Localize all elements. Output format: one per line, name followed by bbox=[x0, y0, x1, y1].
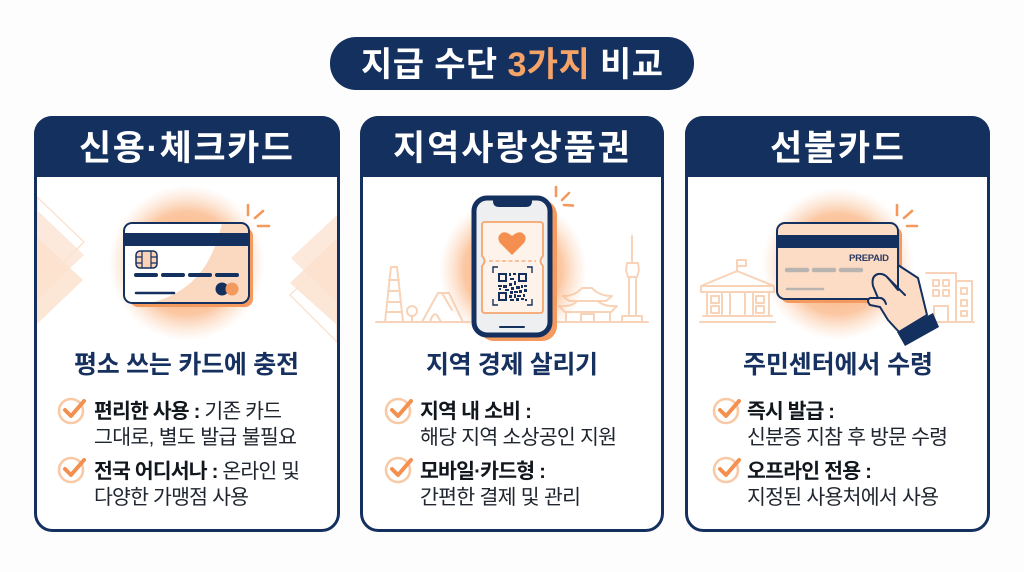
icon: government building bbox=[700, 260, 775, 322]
icon: QR code bbox=[498, 273, 527, 301]
bullet text: 신분증 지참 후 방문 수령 bbox=[747, 426, 948, 449]
title: 지급 수단 3가지 비교 bbox=[361, 46, 663, 84]
subtitle: 지역 경제 살리기 bbox=[426, 351, 598, 379]
panel: 지역사랑상품권 bbox=[360, 116, 664, 530]
bullet text: 지정된 사용처에서 사용 bbox=[747, 486, 939, 509]
icon: phone voucher bbox=[439, 187, 587, 344]
bullet text bbox=[747, 460, 939, 509]
icon: credit card bbox=[109, 185, 269, 341]
panel header bbox=[685, 116, 990, 177]
panel header: 지역사랑상품권 bbox=[393, 129, 630, 168]
panel header: 선불카드 bbox=[770, 129, 904, 168]
icon: prepaid card in hand: PREPAID bbox=[849, 253, 889, 264]
icon: check bbox=[714, 399, 739, 423]
bullet text: 오프라인 전용 : bbox=[747, 460, 872, 483]
bullet text: 즉시 발급 : bbox=[747, 400, 835, 423]
icon: check bbox=[386, 399, 411, 423]
bullet text: 지역 내 소비 : bbox=[420, 400, 532, 423]
subtitle: 평소 쓰는 카드에 충전 bbox=[74, 351, 299, 379]
icon: check bbox=[59, 458, 84, 482]
icon: city skyline bbox=[376, 236, 648, 322]
panel header: 신용·체크카드 bbox=[79, 129, 293, 168]
bullet text bbox=[94, 400, 297, 449]
bullet text: 편리한 사용 : 기존 카드 bbox=[94, 400, 282, 423]
bullet text bbox=[420, 460, 581, 509]
icon: prepaid card in hand bbox=[762, 188, 939, 346]
bullet text: 해당 지역 소상공인 지원 bbox=[420, 426, 617, 449]
subtitle: 주민센터에서 수령 bbox=[743, 351, 933, 379]
bullet text: 모바일·카드형 : bbox=[420, 460, 546, 483]
bullet text bbox=[94, 460, 300, 509]
bullet text: 그대로, 별도 발급 불필요 bbox=[94, 426, 297, 449]
icon: check bbox=[714, 458, 739, 482]
bullet text: 간편한 결제 및 관리 bbox=[420, 486, 581, 509]
bullet text: 다양한 가맹점 사용 bbox=[94, 486, 249, 509]
title bbox=[330, 37, 694, 90]
bullet text bbox=[420, 400, 617, 449]
icon: check bbox=[59, 399, 84, 423]
icon: check bbox=[386, 458, 411, 482]
panel: 신용·체크카드 bbox=[34, 116, 340, 530]
panel header bbox=[360, 116, 664, 177]
panel: 선불카드 bbox=[685, 116, 990, 530]
icon: office buildings bbox=[918, 273, 974, 322]
bullet text: 전국 어디서나 : 온라인 및 bbox=[94, 460, 300, 483]
decorative chevrons bbox=[37, 197, 337, 342]
bullet text bbox=[747, 400, 948, 449]
panel header bbox=[34, 116, 340, 177]
